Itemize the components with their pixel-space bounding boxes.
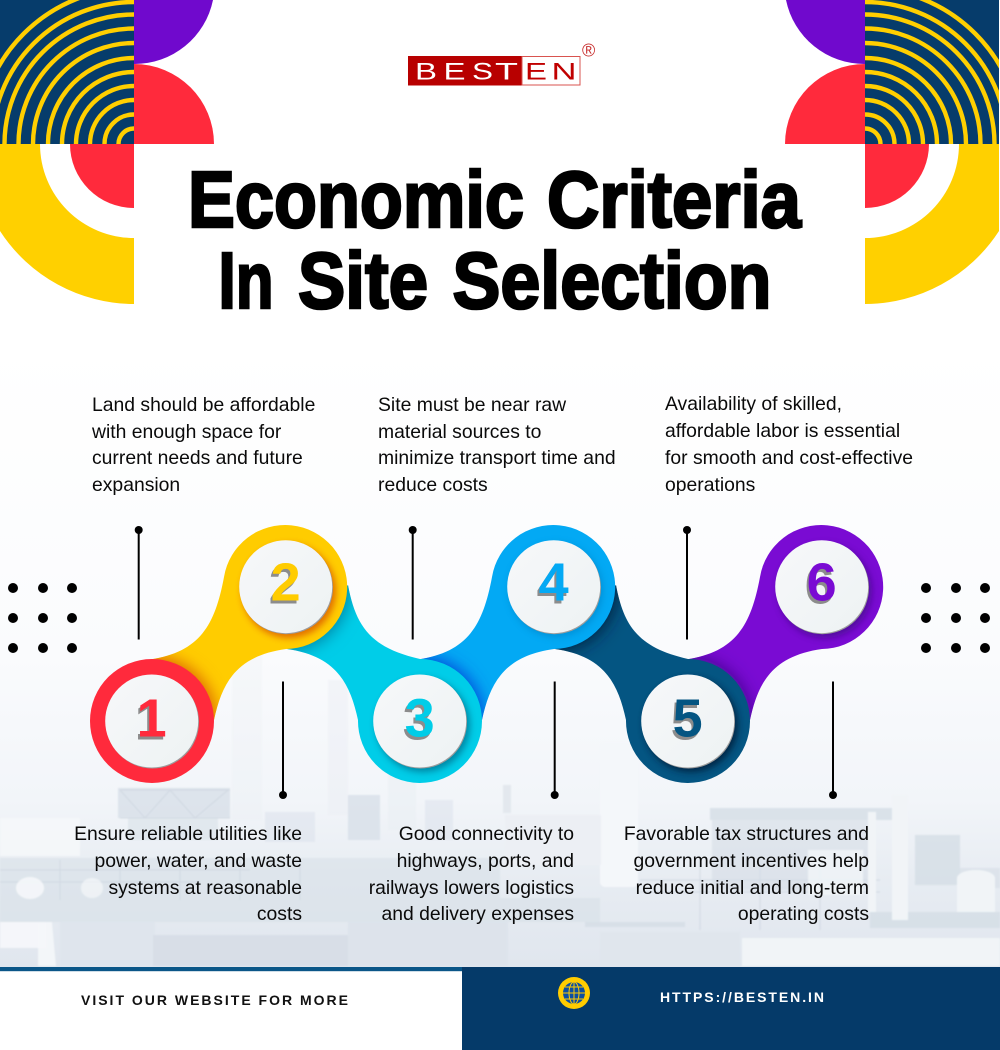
step 2 node: 2 [271,552,301,612]
step 1 node: 1 [137,689,167,749]
step 1 node [90,659,214,783]
centre tank [503,742,638,887]
logo: BESTEN: E [444,58,466,85]
footer: left panel: VISIT OUR WEBSITE FOR MORE [81,992,348,1008]
text block: connectivity: highways, ports, and [397,850,574,872]
text block: land: current needs and future [92,447,303,469]
step 1 node: 1 [135,692,165,752]
step 3 node [287,585,482,783]
text block: raw materials: Site must be near raw [378,394,567,416]
step 5 node: 5 [671,692,701,752]
logo: BESTEN: ® [582,40,595,60]
logo: BESTEN [408,40,595,86]
text block: labor [665,393,913,496]
towers [232,640,416,830]
text block: labor: operations [665,474,755,496]
step 5 node: 5 [673,689,703,749]
title: In [218,236,274,325]
step 3 node: 3 [405,689,435,749]
step 5 node [555,585,750,783]
title: Site [298,236,428,325]
step 6 node: 6 [805,555,835,615]
text block: connectivity: and delivery expenses [382,903,574,925]
text block: connectivity: Good connectivity to [399,823,574,845]
text block: utilities: power, water, and waste [94,850,302,872]
text block: land: Land should be affordable [92,394,315,416]
logo: BESTEN: S [472,58,493,85]
text block: raw materials: material sources to [378,421,541,443]
text block: tax: operating costs [738,903,869,925]
logo: BESTEN: N [552,58,576,85]
footer: right panel: HTTPS://BESTEN.IN [660,989,824,1005]
text block: tax: Favorable tax structures and [624,823,869,845]
decoration: top-right corner shapes [785,0,999,304]
pointer lines: top [135,526,691,640]
logo: BESTEN: T [495,58,519,85]
icon: globe [558,977,590,1009]
text block: connectivity [369,823,574,925]
background: faded industrial plant photo [0,340,1000,970]
title [188,155,801,325]
text block: utilities: costs [257,903,302,925]
title: Selection [452,236,772,325]
text block: labor: Availability of skilled, [665,393,842,415]
text block: raw materials [378,394,616,496]
step 6 node [688,525,884,720]
logo: BESTEN: B [415,58,437,85]
logo: BESTEN: E [525,58,547,85]
text block: connectivity: railways lowers logistics [369,877,574,899]
lower blocks [60,922,508,966]
text block: raw materials: reduce costs [378,474,488,496]
text block: land: expansion [92,474,180,496]
concentric arc square [0,0,134,144]
step 4 node [420,525,616,720]
dot grid: right [921,583,990,653]
text block: utilities: Ensure reliable utilities like [74,823,302,845]
text block: tax: reduce initial and long-term [636,877,869,899]
step 4 node: 4 [537,555,567,615]
step 6 node: 6 [807,552,837,612]
pointer lines: bottom [279,682,837,799]
title: Criteria [547,155,801,244]
right plant structures [710,808,1000,928]
text block: utilities [74,823,302,925]
decoration: top-left corner shapes [0,0,214,304]
step 2 node [150,525,348,720]
text block: tax: government incentives help [634,850,869,872]
footer: left panel [0,967,462,1050]
left plant structures [0,788,600,922]
text block: raw materials: minimize transport time and [378,447,616,469]
text block: land: with enough space for [91,421,282,443]
step 3 node: 3 [403,692,433,752]
text block: labor: for smooth and cost-effective [665,447,913,469]
text block: land [91,394,315,496]
text block: tax [624,823,869,925]
step 2 node: 2 [269,555,299,615]
text block: labor: affordable labor is essential [665,420,900,442]
title: Economic [188,155,524,244]
text block: utilities: systems at reasonable [108,877,302,899]
dot grid: left [8,583,77,653]
step 4 node: 4 [539,552,569,612]
footer: right panel [462,967,1000,1050]
